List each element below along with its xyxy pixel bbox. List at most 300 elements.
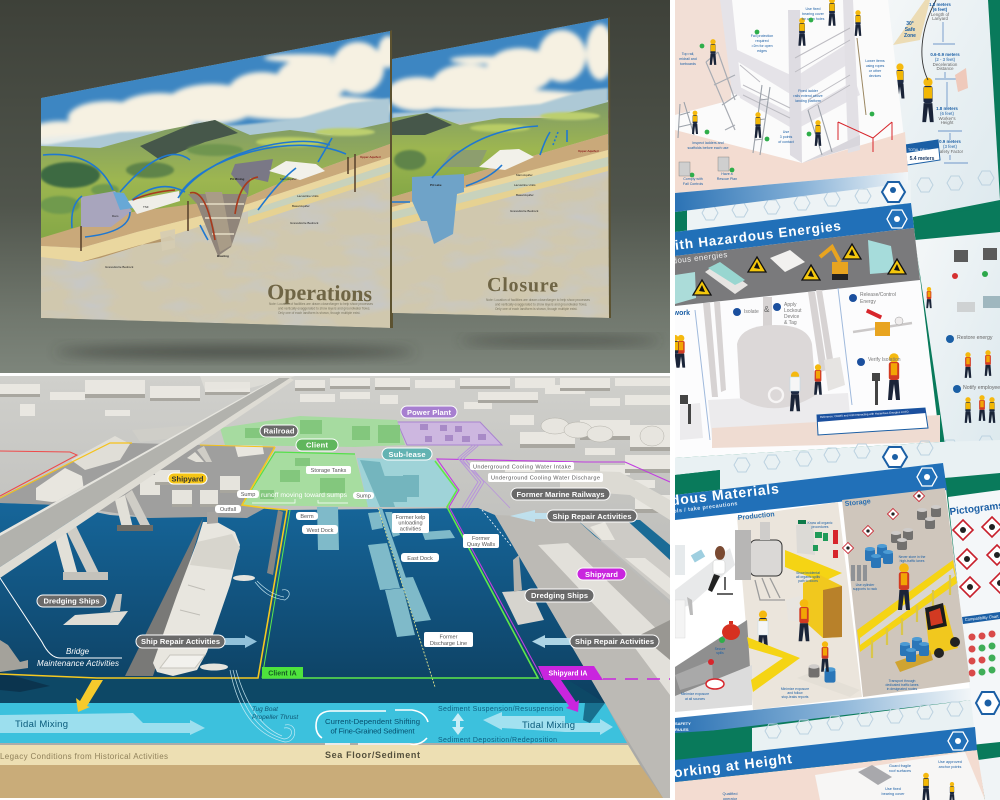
door [796,522,815,555]
containment tray [797,664,860,697]
captions: landing platform [795,99,821,103]
label: legacy conditions: Legacy Conditions from Historical Activities [0,752,168,761]
total fall box [905,140,940,165]
fall distance scale: 0.6-0.9 meters [930,52,960,57]
bollards [872,575,950,658]
label: tidal mixing left: Tidal Mixing [15,719,68,730]
step labels: & Tag [784,320,797,326]
captions: Know all organic [808,521,833,525]
worker: harness [922,78,934,122]
pill: ship repair north: Ship Repair Activities [552,512,632,521]
mine pit [188,192,248,256]
grey hazard band [675,228,920,306]
captions: bearing cover [802,12,825,16]
grey counter [675,620,752,710]
pill: ship repair west: Ship Repair Activities [141,637,220,646]
captions: Use fixed [885,787,901,791]
captions: and follow [787,691,803,695]
arrow: ship repair west [225,635,257,648]
captions: required [755,39,769,43]
title: Hazardous Materials [628,480,780,513]
footer hex icons [917,171,994,192]
fall distance scale: 0.9 meters [939,139,961,144]
boundary: shipyard IA magenta [437,459,670,679]
pill: shipyard magenta: Shipyard [585,570,618,579]
dredging barge right [502,555,544,625]
wells [81,154,355,251]
sub-lease area [357,458,457,507]
label: sediment suspension: Sediment Suspension/Resuspension [438,706,563,713]
forklift [925,603,960,658]
subheading: hazardous energies [650,250,728,268]
label: sediment deposition: Sediment Deposition/Redeposition [438,737,557,744]
captions: Use approved [938,760,962,764]
blue title band [675,463,947,520]
map labels: Granodiorite Bedrock [105,265,134,269]
workers [926,287,995,423]
hex icon [948,732,968,750]
callouts: white site labels: East Dock [407,556,433,562]
label: tidal mixing right: Tidal Mixing [522,720,575,731]
label: propeller thrust [252,706,299,721]
skylight grid [858,765,892,785]
safe zone label: 30° [906,21,914,27]
captions [681,521,925,701]
map labels: Pit Lake [430,183,442,187]
map labels: Lacustrine Units [297,194,319,198]
arrow: tidal mixing right [483,712,613,735]
left green edge [675,205,687,232]
fall distance scale: Worker's [938,116,956,121]
note: operations [269,302,373,315]
worker: swinging [896,63,904,98]
note: operations: Note: Location of facilities are drawn closer/larger to help show processes [269,302,373,306]
captions: Secure [715,647,725,651]
green tab right [945,473,1000,497]
captions: Use [783,130,789,134]
right shipyard piers [495,470,670,800]
strip above height poster [752,700,976,752]
captions: in designated routes [887,687,918,691]
footer text: RULES [675,727,689,732]
callouts: white site labels: Former kelp [396,515,425,521]
panel: harbor sediment diagram [0,376,670,800]
captions: roof surfaces [889,769,911,773]
captions: all organic spills [796,575,820,579]
safe zone cone [893,0,930,45]
strip icons [734,441,933,472]
client IA label: Client IA [268,670,297,678]
captions: high-traffic lanes [900,559,925,563]
strip icons [702,189,871,220]
captions: Never store in the [899,555,925,559]
WRSF hill [479,149,534,170]
label: propeller thrust: Propeller Thrust [252,714,299,721]
work table [770,250,805,272]
total fall box: 5.4 meters [910,156,935,162]
captions: >2m for open [751,44,773,48]
stepladder [678,102,694,138]
lab coat worker [790,372,800,411]
barricade [838,122,892,152]
pier end [583,703,605,723]
storage worker [898,563,910,610]
safe zone label: Safe [905,27,915,33]
pill: ship repair east [570,635,659,648]
reference box: Reference: OGMS and 4.93 Interacting with Hazardous Energies LOTO [820,410,909,419]
harbor water [0,503,605,703]
captions: bearing cover [881,792,905,796]
propeller thrust swirl [230,581,295,742]
fat arrow: yellow [76,680,103,712]
shipyard IA label: Shipyard IA [549,670,587,678]
lab bench [675,545,735,615]
mixing vessel [735,522,782,580]
safe zone label: Zone [904,33,916,39]
flow arrows [392,126,567,202]
lab worker [708,546,733,594]
captions: anchor points [939,765,961,769]
waste rock pile [231,159,273,195]
captions: Qualified [722,792,738,796]
pill: railroad [260,425,298,437]
map labels: Blasting [217,254,229,258]
step labels: & [764,305,770,314]
footer hex icons [942,436,994,454]
step: restore energy [946,335,993,343]
pill: railroad: Railroad [264,427,295,436]
client area [220,416,405,507]
boundary: client IA green [262,461,538,678]
green checks [690,18,874,177]
storage tanks [541,418,664,446]
captions: at all sources [685,697,705,701]
switch box [824,357,845,391]
release valve [853,309,912,336]
captions: stop-leaks reports [782,695,809,699]
poster: hazardous materials [628,463,971,735]
workers [922,773,955,800]
pill: dredging ships right: Dredging Ships [531,591,588,600]
scaffold [706,52,737,130]
footer band [675,688,971,735]
callouts: white site labels: activities [400,526,421,532]
captions: midrail and [679,57,697,61]
captions: Have a [721,172,733,176]
shipyard land [0,443,275,518]
strip icons [765,702,963,738]
prohibit mark [708,659,714,665]
callouts: white site labels: Sump [356,494,371,500]
teal machine [675,272,696,304]
building frame [815,752,985,800]
step labels [733,292,901,366]
callouts: white site labels: Former [472,536,490,542]
captions: rails extend above [793,94,823,98]
production heading: Production [737,511,775,522]
city buildings [0,376,670,513]
band: water column [0,703,627,743]
floor [708,393,852,440]
runoff label: runoff moving toward sumps [261,492,348,499]
arrow: ship repair north [510,510,547,522]
captions: 3 points [780,135,792,139]
callouts: white site labels: Underground Cooling Water Intake [473,464,571,470]
label: sea floor: Sea Floor/Sediment [325,750,420,760]
shelf: blue drums [865,544,893,568]
total fall box: TOTAL FALL [908,148,929,152]
switch icons [952,248,1000,312]
shelf: white drums [917,505,941,529]
captions: Show incidental [796,571,820,575]
shoreline buildings [36,436,264,507]
captions: Minimize exposure [781,687,809,691]
control cabinet [868,240,895,274]
floor [675,130,908,193]
hex icon: energies dark [883,447,907,467]
lockout switch [680,395,691,424]
fall distance scale: Length of [931,12,950,17]
pill: dredging ships left: Dredging Ships [44,597,100,606]
moored ship [153,512,240,676]
captions: edges [757,49,767,53]
step labels: Device [784,314,800,320]
extinguishers [833,530,838,558]
dredging ship left [63,594,128,625]
map labels [430,149,599,213]
green tab left [675,470,720,496]
boundary: shipyard IA yellow [0,447,287,678]
map labels: Lacustrine Units [514,183,536,187]
production zone [737,502,862,710]
fall distance scale: Height [941,120,954,125]
label: bridge maintenance: Bridge [66,647,90,656]
impact illustration [955,68,968,92]
callouts: white site labels: Discharge Line [430,641,467,647]
captions: Use fixed [806,7,820,11]
map labels: Upper Aquifer/ [578,149,599,153]
lockout worker [814,364,822,395]
label: bridge maintenance: Maintenance Activities [37,659,119,668]
fall distance scale: (2 - 3 feet) [935,57,956,62]
captions: Transport through [889,679,916,683]
fall distance scale: 1.8 meters [936,106,958,111]
callouts: white site labels: West Dock [307,528,334,534]
grey pier [125,518,203,676]
captions: scaffolds before each use [688,146,728,150]
GHS diamonds [842,490,924,554]
captions: Use cylinder [856,583,875,587]
pill: ship repair north [547,510,637,522]
dam [81,191,132,227]
pit lake [412,174,464,244]
storage heading: Storage [844,498,871,508]
tailings facility [128,191,180,214]
captions: of contact [778,140,794,144]
callouts: white site labels: Quay Walls [467,542,495,548]
WRSF hill [269,161,325,180]
map labels: Granodiorite Bedrock [290,221,319,225]
fuel can [722,621,740,640]
footer band [675,172,908,212]
compatibility chart [962,612,1000,676]
lab coat edge [675,600,685,638]
shelf: gas cylinders [851,565,867,581]
pill: shipyard yellow [168,473,207,484]
callouts: white site labels [215,462,603,647]
contaminant flow arrows [133,177,258,240]
lanyard [922,0,936,80]
building frame [720,0,860,163]
side poster: pictograms [948,490,1000,745]
step labels: Release/Control [860,292,896,298]
pill: former marine railways: Former Marine Railways [516,490,604,499]
map labels: Pit Mining [230,177,244,181]
pill: dredging ships right [525,589,594,602]
shelf: dark drums [891,528,913,550]
subtitle: controls / take precautions [657,501,738,517]
side poster: restore energy [911,206,1000,454]
note: closure: Only one of each landform is shown, though multiple exist. [495,307,578,311]
dashed quay line [482,510,512,547]
cabinet worker [799,599,809,641]
verify stand [872,373,880,405]
captions: dedicated traffic lanes [886,683,919,687]
panel dividers [695,288,852,440]
power plant [397,422,502,445]
captions: Rescue Plan [717,177,737,181]
footer text [675,721,691,732]
note: operations: Only one of each landform is shown, though multiple exist. [278,311,361,315]
map labels: Basal Aquifer [516,193,534,197]
captions: Fixed ladder [798,89,819,93]
captions: or other [869,69,882,73]
yellow hazmat cabinet [786,575,842,638]
verify worker [888,353,900,400]
callouts: white site labels: Underground Cooling Water Discharge [491,476,600,482]
chevron floor marking [747,637,800,692]
fall distance scale: (3 feet) [943,144,957,149]
back wall [675,0,733,115]
map labels: Basal Aquifer [292,204,310,208]
fall distance scale: Deceleration [933,62,958,67]
poster: operations [26,30,398,328]
pill: client: Client [306,441,328,450]
map labels: Dam [112,214,119,218]
fall distance scale [929,2,964,154]
reactor vessel [737,325,816,408]
no-food sign [706,679,724,689]
pill: former marine railways [511,488,610,500]
note: closure [486,298,590,311]
pill: power plant: Power Plant [407,408,452,417]
pill: client [296,439,338,451]
docks [317,507,455,637]
eyewash signs [813,532,828,551]
hex icon [887,210,907,228]
tug boats [200,575,255,670]
underground pipes [458,445,510,508]
bridge deck [0,378,294,578]
left workers [671,335,685,368]
pill: ship repair east: Ship Repair Activities [575,637,654,646]
pill: power plant [401,406,457,418]
title: closure: Closure [487,274,558,297]
captions: Fall protection [751,34,773,38]
hex icon [917,468,937,486]
map labels: Granodiorite Bedrock [510,209,539,213]
runoff label [252,492,348,503]
poster: working at height lower [659,727,1000,800]
sediment shifting loop: Current-Dependent Shifting [325,717,420,726]
sediment shifting loop: of Fine-Grained Sediment [330,726,415,736]
yellow floor hatch [785,550,842,582]
step: notify employees [953,385,1000,393]
blue title band [675,727,977,782]
poster: closure [386,17,614,318]
lab coat walker [758,611,768,650]
poster: working at height [675,0,908,212]
panel: safety posters [628,0,1000,800]
captions: using ropes [866,64,884,68]
yellow walkway [857,560,957,652]
arrow: bridge maintenance [0,578,122,658]
robot arm [820,247,848,280]
client IA label [262,667,303,678]
captions [679,7,885,186]
fall distance scale: (6 feet) [940,111,954,116]
tailings pond [113,192,133,210]
pill: shipyard magenta [577,568,626,580]
captions: Top rail, [682,52,694,56]
callouts: white site labels: Sump [241,492,255,498]
label: propeller thrust: Tug Boat [252,706,279,713]
poster strip: energies header [687,180,911,231]
pill: dredging ships left [37,595,106,607]
teal tanks [705,262,748,294]
fat arrow: magenta [550,680,579,712]
arrow: tidal mixing left [0,713,205,735]
map labels [105,155,381,269]
note: operations: and vertically exaggerated to show layers and groundwater flows. [278,306,370,310]
permit sheets [679,157,729,176]
poster shadow: operations [55,346,415,358]
captions: supports to rack [853,587,877,591]
fixed ladder [808,105,832,155]
map labels: Upper Aquifer/ [360,155,381,159]
callouts: white site labels: unloading [398,521,423,527]
title: Working at Height [659,750,793,782]
fall distance scale: 1.8 meters [929,2,951,7]
boundary lines [0,443,275,498]
captions: devices [869,74,881,78]
note: closure: and vertically exaggerated to show layers and groundwater flows. [495,302,587,306]
captions [722,760,962,800]
step labels: Apply [784,302,797,308]
callouts: white site labels: Berm [300,514,314,520]
note: closure: Note: Location of facilities are drawn closer/larger to help show processes [486,298,590,302]
pill: sub-lease: Sub-lease [388,450,426,459]
captions: procedures [812,525,829,529]
captions: path to doors [798,579,818,583]
fall distance scale: Distance [936,66,954,71]
title: operations: Operations [267,279,373,306]
tray worker [821,641,829,672]
lowering rope [857,38,866,115]
fall distance scale: Lanyard [932,16,948,21]
fall distance scale: (6 feet) [933,7,948,12]
map labels: Main Aquifer [280,177,297,181]
